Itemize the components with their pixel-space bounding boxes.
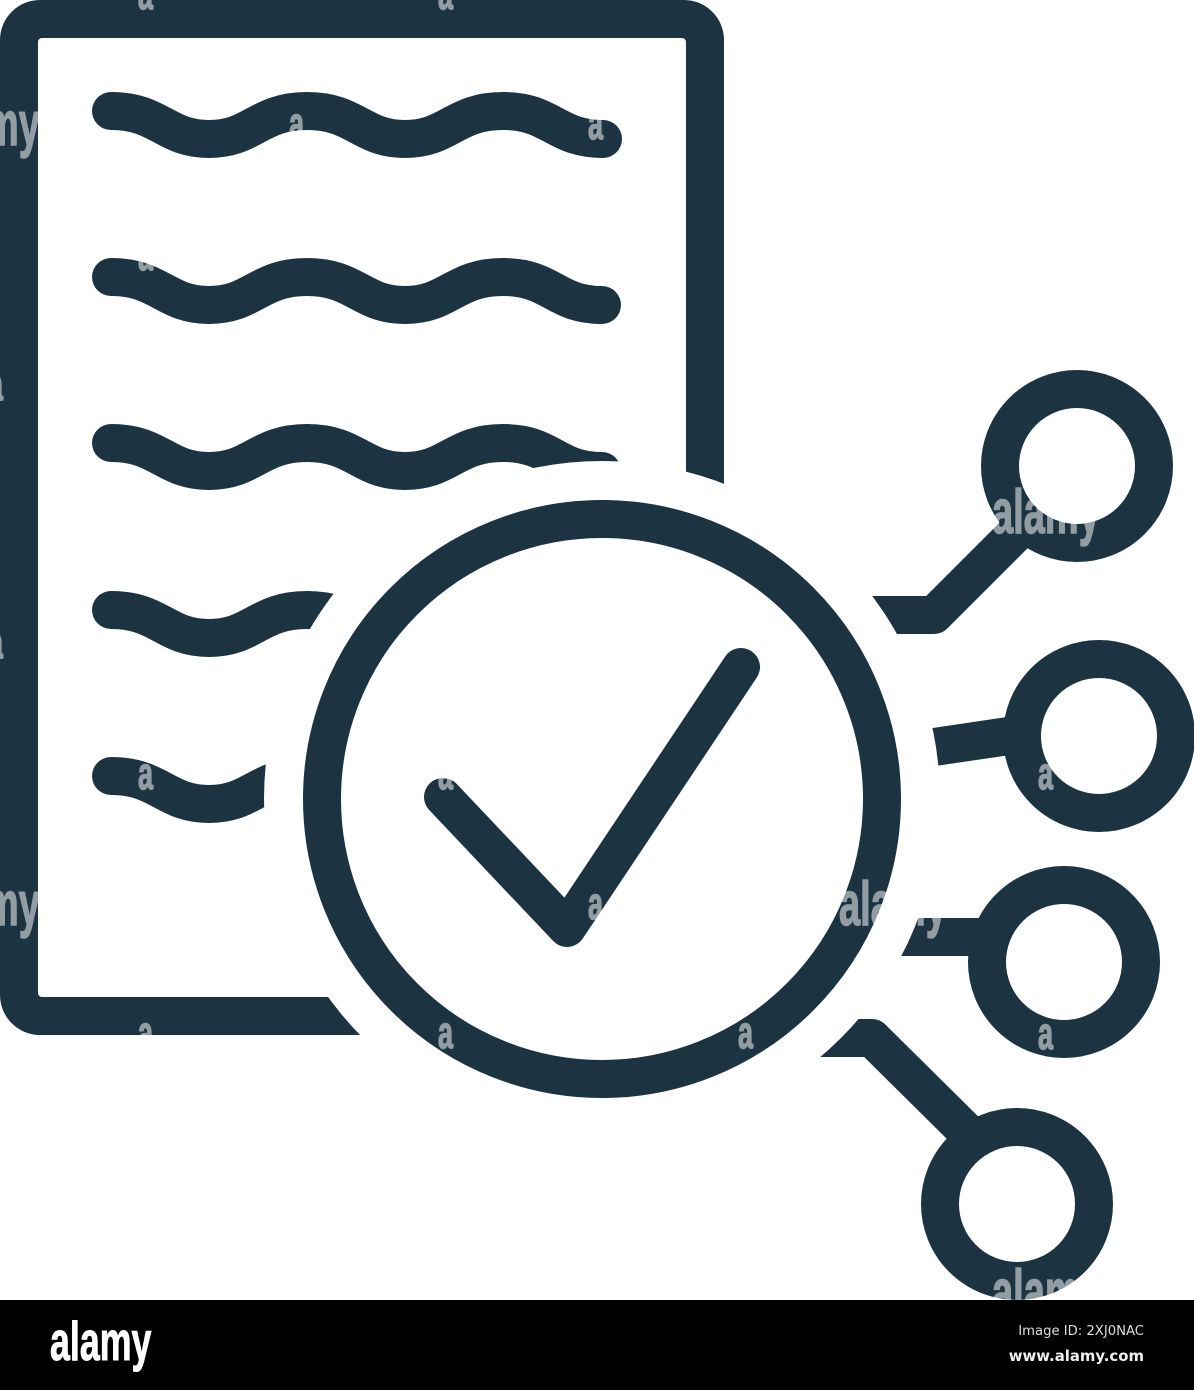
watermark: a <box>1038 748 1053 799</box>
text lines <box>111 111 603 804</box>
watermark: a <box>738 1007 753 1058</box>
watermark: a <box>289 98 304 149</box>
site url: www.alamy.com <box>1009 1347 1144 1365</box>
check mark <box>443 667 741 928</box>
footer bar <box>0 1300 1194 1390</box>
watermark: a <box>588 98 603 149</box>
node 4 <box>940 1127 1094 1281</box>
watermark: a <box>138 229 153 280</box>
node 2 <box>1022 659 1176 813</box>
image id: Image ID: 2XJ0NAC <box>1018 1324 1144 1339</box>
watermark: a <box>138 748 153 799</box>
white clearance around badge <box>264 461 940 1137</box>
alamy logo: alamy <box>50 1310 151 1372</box>
watermark: alamy <box>839 868 947 938</box>
connector stubs <box>780 522 1027 1140</box>
watermark: a <box>438 748 453 799</box>
node 3 <box>987 885 1141 1039</box>
watermark: alamy <box>992 476 1100 546</box>
watermark: a <box>138 1007 153 1058</box>
watermark: a <box>438 1007 453 1058</box>
badge circle <box>322 519 882 1079</box>
document outline <box>0 0 724 1035</box>
watermark: a <box>588 878 603 929</box>
node 1 <box>1000 389 1154 543</box>
watermark: a <box>1038 1008 1053 1059</box>
